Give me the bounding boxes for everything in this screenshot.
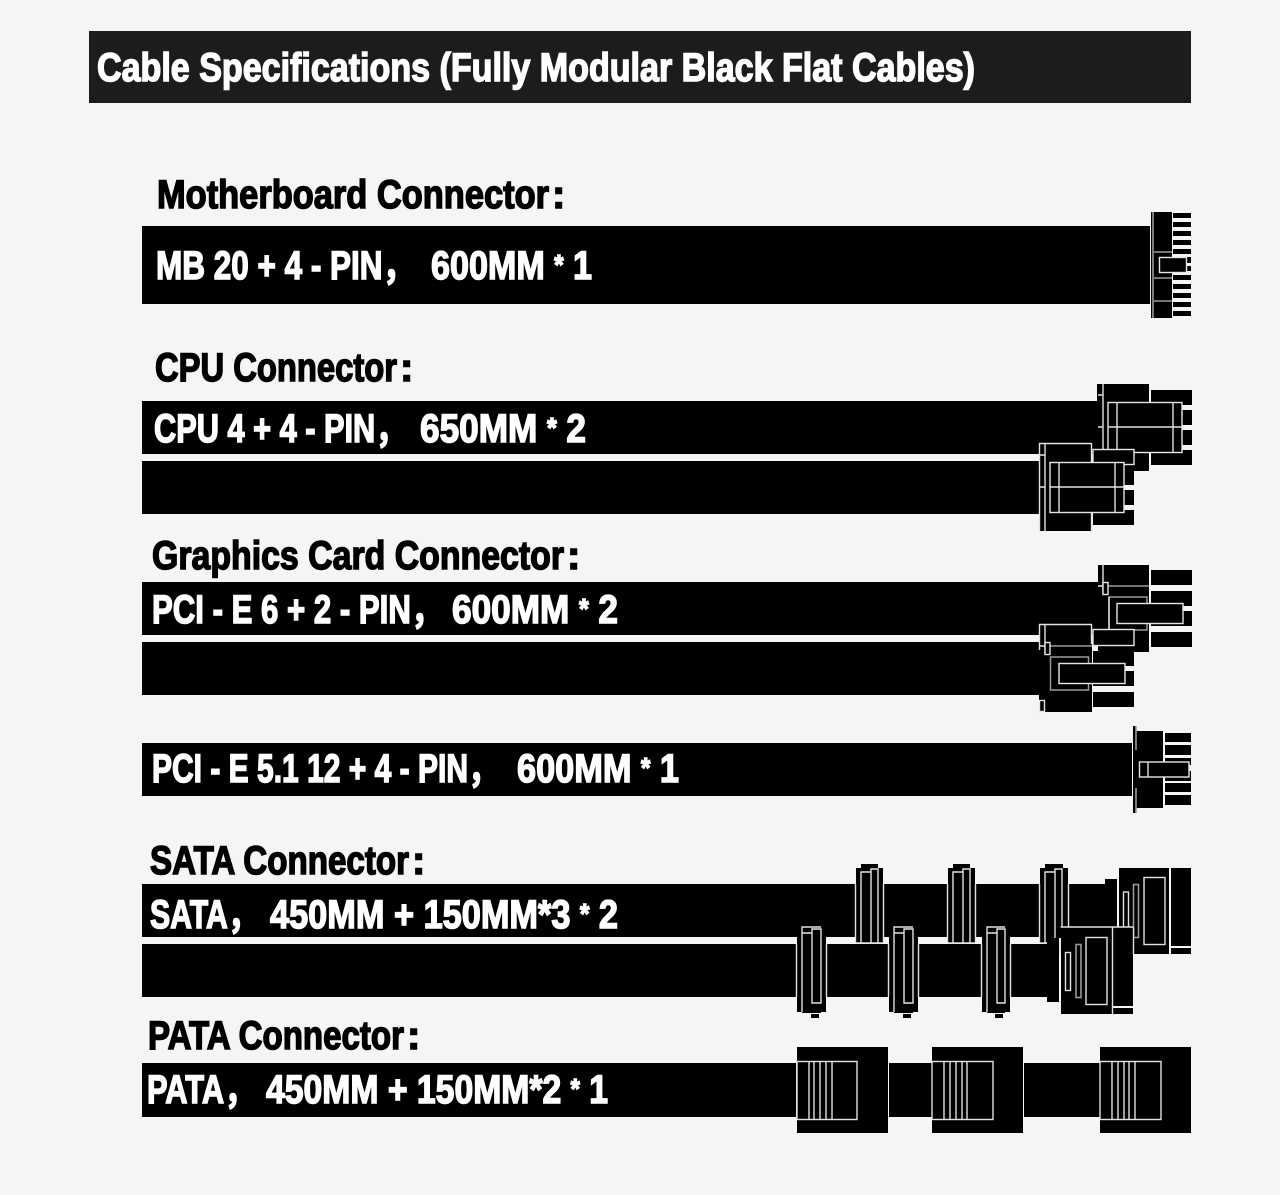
- panel: PATA connector: [142, 1014, 1191, 1133]
- cable bar: PCI-E 5.1: [142, 743, 1132, 796]
- cable spec: CPU: CPU 4 + 4 - PIN，: [154, 407, 406, 451]
- icon: PATA plug 3: [1100, 1047, 1191, 1133]
- cable spec: PATA: *: [571, 1073, 580, 1104]
- cable spec: PATA: 450MM + 150MM*2: [266, 1068, 616, 1112]
- title banner: [89, 31, 1191, 103]
- icon: SATA plugs row 1: [856, 864, 1068, 943]
- cable spec: motherboard: 1: [564, 244, 592, 288]
- icon: SATA end connector bottom: [1047, 927, 1134, 1014]
- icon: PCI-E connector bottom: [1039, 624, 1134, 712]
- icon: CPU connector bottom: [1039, 443, 1134, 531]
- cable spec: SATA: *: [580, 898, 589, 929]
- cable spec: PCI-E 5.1: *: [641, 752, 650, 783]
- icon: CPU connector top: [1097, 384, 1192, 471]
- heading: CPU connector: CPU Connector: [155, 346, 397, 390]
- panel: SATA connector: [142, 839, 1191, 1018]
- panel: CPU connector: [142, 346, 1192, 531]
- title: Cable Specifications (Fully Modular Black Flat Cables): [97, 46, 975, 90]
- cable spec: CPU: 2: [557, 407, 586, 451]
- heading: SATA connector: :: [412, 839, 425, 883]
- heading: graphics card connector: Graphics Card Connector: [152, 534, 564, 578]
- heading: SATA connector: SATA Connector: [150, 839, 409, 883]
- heading: CPU connector: :: [400, 346, 413, 390]
- cable spec: PCI-E 6+2: PCI - E 6 + 2 - PIN，: [152, 588, 442, 632]
- panel: motherboard connector: [142, 173, 1191, 318]
- heading: PATA connector: :: [407, 1014, 420, 1058]
- cable spec: CPU: *: [547, 412, 557, 443]
- cable spec: PCI-E 6+2: *: [579, 593, 589, 624]
- icon: SATA end connector top: [1105, 868, 1191, 954]
- icon: 24-pin connector: [1151, 212, 1191, 318]
- cable spec: SATA: 450MM + 150MM*3: [270, 893, 620, 937]
- cable spec: PCI-E 5.1: 600MM: [517, 747, 650, 791]
- heading: motherboard connector: Motherboard Connector: [157, 173, 549, 217]
- icon: PCI-E connector top: [1098, 565, 1192, 652]
- heading: PATA connector: PATA Connector: [148, 1014, 404, 1058]
- cable spec: PCI-E 5.1: PCI - E 5.1 12 + 4 - PIN，: [152, 747, 498, 791]
- cable bars: CPU: [142, 401, 1097, 514]
- cable spec: PATA: PATA，: [147, 1068, 255, 1112]
- cable bars: PCI-E 6+2: [142, 582, 1098, 695]
- cable spec: CPU: 650MM: [420, 407, 553, 451]
- cable spec: PCI-E 5.1: 1: [650, 747, 679, 791]
- cable spec: motherboard: 600MM: [431, 244, 564, 288]
- cable spec: PATA: 1: [580, 1068, 608, 1112]
- icon: PATA plug 2: [932, 1047, 1023, 1133]
- cable spec: motherboard: MB 20 + 4 - PIN，: [156, 244, 414, 288]
- cable bar: motherboard: [142, 226, 1150, 304]
- cable spec: SATA: 2: [589, 893, 618, 937]
- cable spec: motherboard: *: [554, 249, 564, 280]
- icon: PATA plug 1: [797, 1047, 888, 1133]
- cable spec: SATA: SATA，: [150, 893, 258, 937]
- cable spec: PCI-E 6+2: 600MM: [452, 588, 585, 632]
- cable bar: PATA: [142, 1063, 1100, 1117]
- cable bars: SATA: [142, 884, 1105, 997]
- icon: 12+4 pin connector: [1133, 726, 1191, 813]
- cable spec: PCI-E 6+2: 2: [589, 588, 618, 632]
- icon: SATA plugs row 2: [796, 923, 1010, 1018]
- heading: graphics card connector: :: [567, 534, 580, 578]
- heading: motherboard connector: :: [552, 173, 565, 217]
- panel: graphics card connector: [142, 534, 1192, 813]
